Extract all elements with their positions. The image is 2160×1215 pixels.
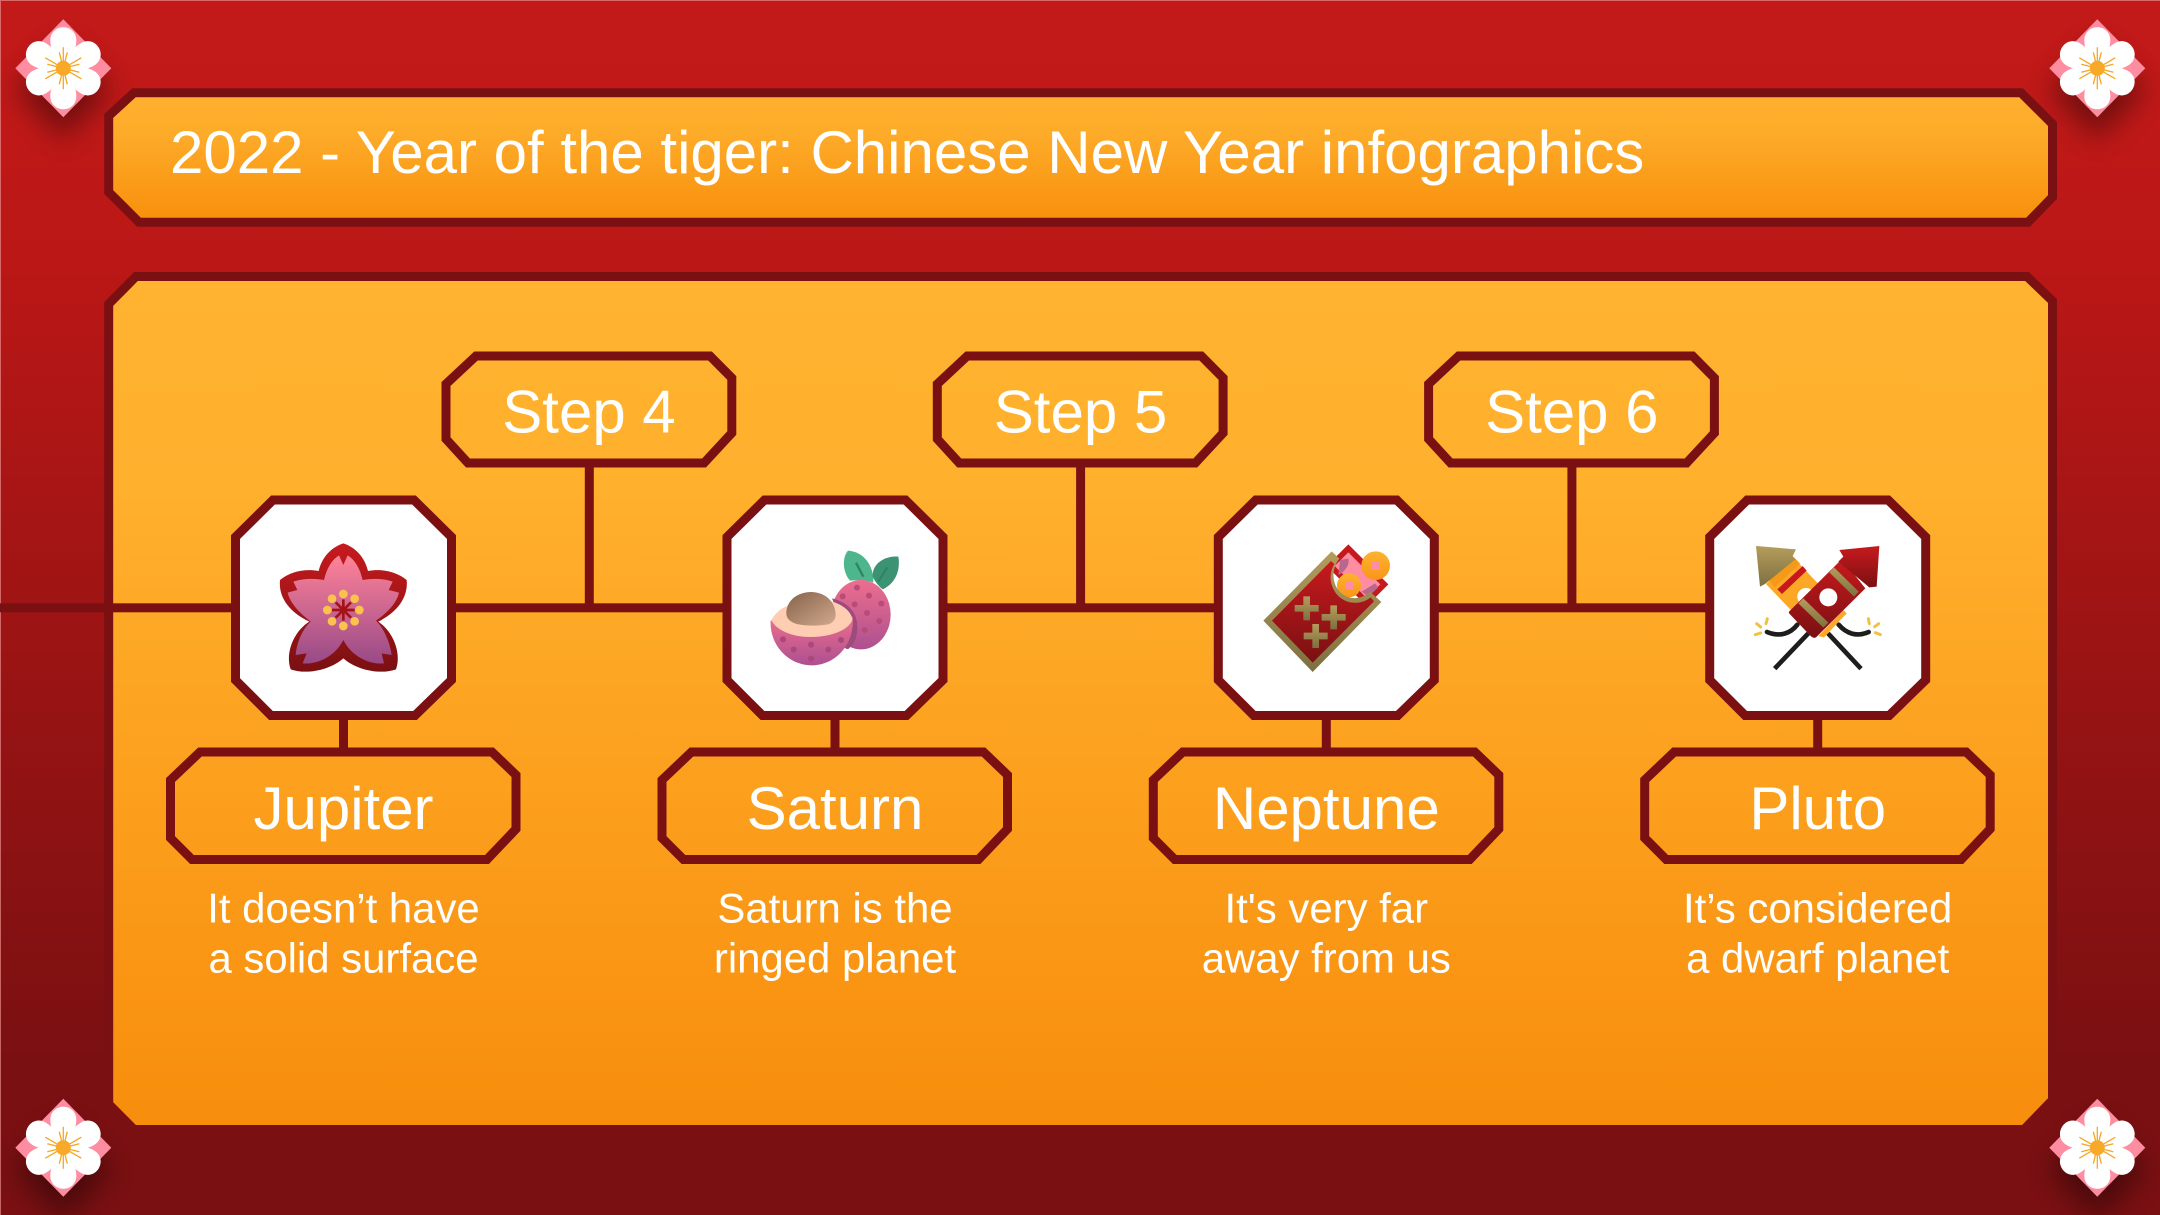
name box xyxy=(170,752,516,860)
connector xyxy=(1322,715,1331,755)
step 4 xyxy=(446,356,732,608)
description: a dwarf planet xyxy=(1686,935,1950,982)
column: Neptune xyxy=(1153,500,1499,982)
description: a solid surface xyxy=(208,935,479,982)
corner flower: top right xyxy=(2049,19,2145,139)
name box xyxy=(662,752,1008,860)
description: Saturn is the xyxy=(717,884,953,931)
icon box xyxy=(727,500,943,716)
title: 2022 - Year of the tiger: Chinese New Year infographics xyxy=(170,119,1644,186)
icon: red envelope xyxy=(1263,544,1390,672)
connector xyxy=(1076,463,1085,608)
corner flower: bottom right xyxy=(2049,1099,2145,1215)
step box xyxy=(446,356,732,463)
description: It’s considered xyxy=(1683,884,1952,931)
icon box xyxy=(1218,500,1434,716)
step label: Step 5 xyxy=(994,378,1167,446)
description: It's very far xyxy=(1225,884,1428,931)
name: Saturn xyxy=(747,775,923,842)
name: Neptune xyxy=(1213,775,1440,842)
connector xyxy=(339,715,348,755)
connector xyxy=(1813,715,1822,755)
main panel xyxy=(109,276,2053,1130)
column: Jupiter xyxy=(170,500,516,982)
name box xyxy=(1645,752,1990,860)
description: away from us xyxy=(1202,935,1451,982)
timeline line xyxy=(0,603,1710,612)
step box xyxy=(937,356,1223,463)
step label: Step 6 xyxy=(1485,378,1659,446)
corner flower: top left xyxy=(15,19,111,139)
connector xyxy=(1567,463,1576,608)
icon box xyxy=(236,500,452,716)
icon: plum blossom xyxy=(280,543,407,672)
connector xyxy=(830,715,840,755)
step label: Step 4 xyxy=(502,378,676,446)
name box xyxy=(1153,752,1499,860)
connector xyxy=(585,463,594,608)
icon box xyxy=(1710,500,1926,716)
name: Jupiter xyxy=(253,775,434,842)
step 5 xyxy=(937,356,1223,608)
title banner xyxy=(109,93,2053,222)
corner flower: bottom left xyxy=(15,1099,111,1215)
name: Pluto xyxy=(1749,775,1886,842)
column: Pluto xyxy=(1645,500,1990,982)
icon: firecrackers xyxy=(1755,546,1880,669)
description: ringed planet xyxy=(714,935,956,982)
icon: lychee xyxy=(771,551,899,665)
step 6 xyxy=(1429,356,1714,608)
description: It doesn’t have xyxy=(207,884,480,931)
column: Saturn xyxy=(662,500,1008,982)
step box xyxy=(1429,356,1714,463)
